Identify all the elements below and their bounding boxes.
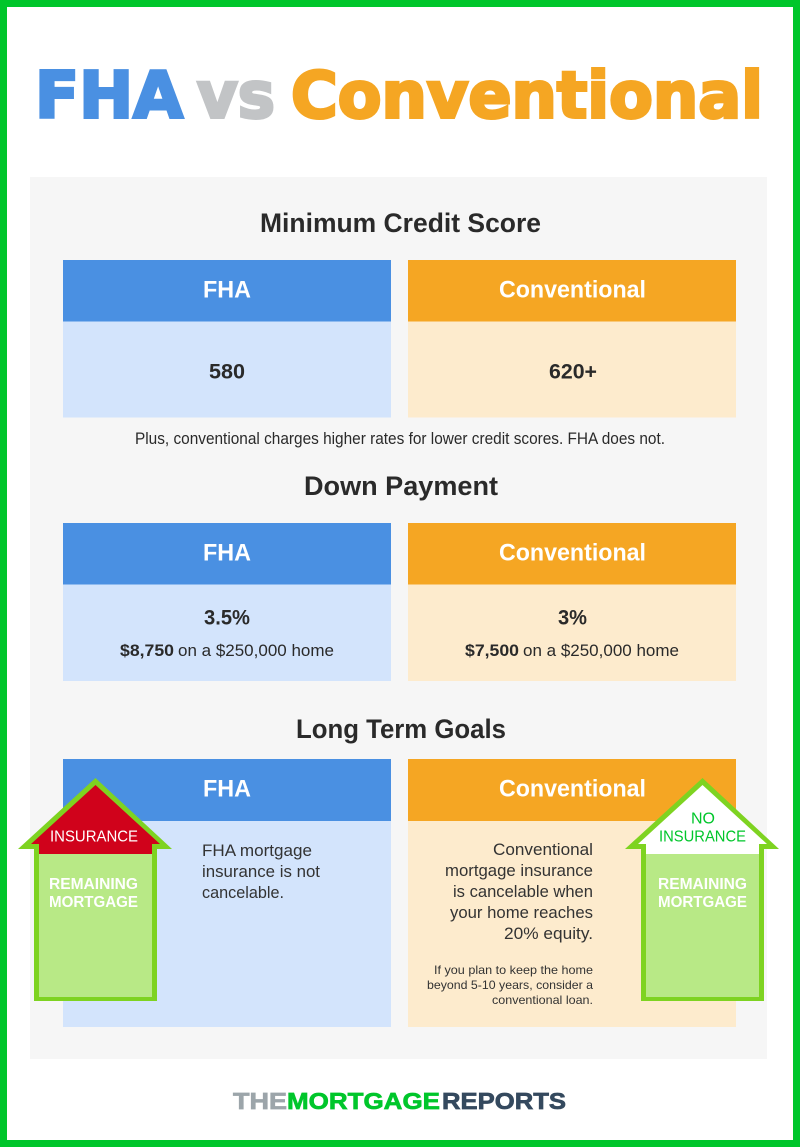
icon: FHA arrow with insurance: REMAINING: [49, 876, 138, 893]
card: conventional credit score: 620+: [549, 360, 597, 384]
card: FHA credit score: 580: [209, 360, 245, 384]
icon: conventional arrow with no insurance: INSURANCE: [659, 828, 746, 846]
heading: long term goals: Long Term Goals: [296, 714, 506, 744]
card: FHA long term: cancelable.: [202, 883, 284, 902]
panel: long term goals: [63, 714, 736, 1027]
card: conventional down payment: 3%: [558, 606, 587, 630]
card: conventional down payment: $7,500: [465, 642, 519, 660]
card: conventional long term: your home reaches: [450, 903, 593, 922]
card: conventional down payment: Conventional: [499, 540, 646, 566]
card: conventional down payment: [408, 523, 736, 681]
card: FHA down payment: 3.5%: [204, 606, 250, 630]
card: FHA down payment: FHA: [203, 540, 251, 566]
logo: THE: [233, 1088, 287, 1114]
card: conventional long term: Conventional: [493, 840, 593, 859]
card: conventional long term: is cancelable when: [453, 882, 593, 901]
title: [35, 60, 763, 134]
logo: MORTGAGE: [287, 1088, 440, 1114]
icon: conventional arrow with no insurance: NO: [691, 810, 715, 828]
card: FHA credit score: FHA: [203, 276, 251, 304]
card: conventional credit score: [408, 260, 736, 418]
note: credit score rates: Plus, conventional charges higher rates for lower credit scores. FHA does not.: [135, 430, 665, 448]
panel: down payment: [63, 471, 736, 681]
card: FHA down payment: [63, 523, 391, 681]
card: conventional long term: [408, 759, 736, 1027]
card: conventional long term: If you plan to keep the home: [434, 963, 593, 977]
card: conventional long term: mortgage insurance: [445, 861, 593, 880]
card: conventional down payment: on a $250,000 home: [523, 642, 679, 660]
icon: conventional arrow with no insurance: [625, 778, 779, 1001]
icon: conventional arrow with no insurance: REMAINING: [658, 876, 747, 893]
card: FHA credit score: [63, 260, 391, 418]
card: FHA long term: FHA mortgage: [202, 841, 312, 860]
logo: REPORTS: [442, 1088, 566, 1114]
card: conventional long term: 20% equity.: [504, 924, 593, 943]
logo: [233, 1088, 566, 1114]
card: conventional long term: conventional loan.: [492, 993, 593, 1007]
icon: conventional arrow with no insurance: MORTGAGE: [658, 894, 747, 911]
card: conventional credit score: Conventional: [499, 276, 646, 304]
heading: minimum credit score: Minimum Credit Score: [260, 208, 541, 238]
icon: FHA arrow with insurance: MORTGAGE: [49, 894, 138, 911]
card: FHA down payment: on a $250,000 home: [178, 642, 334, 660]
card: FHA down payment: $8,750: [120, 642, 174, 660]
title: vs: [197, 60, 275, 134]
card: conventional long term: beyond 5-10 years, consider a: [427, 978, 593, 992]
title: FHA: [35, 60, 183, 134]
panel: comparison background: [30, 177, 767, 1059]
icon: FHA arrow with insurance: INSURANCE: [50, 828, 138, 846]
panel: minimum credit score: [63, 208, 736, 448]
card: FHA long term: FHA: [203, 776, 251, 802]
icon: FHA arrow with insurance: [18, 778, 172, 1001]
card: conventional long term: Conventional: [499, 776, 646, 802]
title: Conventional: [291, 60, 763, 134]
card: FHA long term: [63, 759, 391, 1027]
heading: down payment: Down Payment: [304, 471, 498, 501]
card: FHA long term: insurance is not: [202, 862, 320, 881]
